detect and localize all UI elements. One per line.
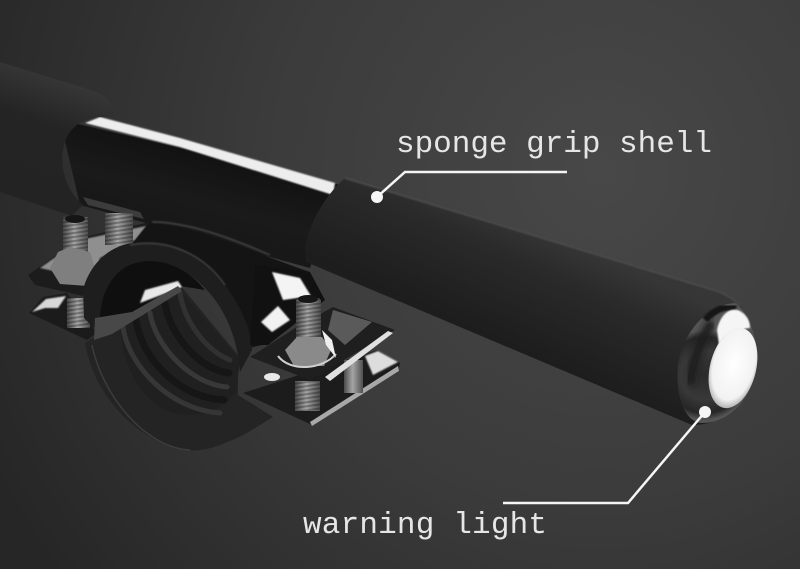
label: sponge grip shell: sponge grip shell [396, 127, 712, 162]
left grip [0, 62, 115, 216]
label: warning light: warning light [303, 508, 547, 543]
tube highlight [85, 117, 335, 195]
band rear [133, 222, 310, 350]
warning light end cap [677, 303, 765, 423]
bolt: front right [296, 295, 321, 342]
bolt: rear left [63, 215, 88, 261]
bolt: rear centre [105, 213, 133, 245]
handlebar tube [60, 117, 340, 268]
clamp band [83, 222, 310, 450]
lens [701, 323, 765, 413]
lower shell [85, 285, 273, 450]
right clamp plates and bolts [243, 265, 400, 426]
nut: rear left [50, 247, 95, 286]
lower left plate [29, 293, 97, 340]
clamp upper ring [83, 242, 252, 372]
lower bolts [295, 381, 320, 411]
rear clamp plates and bolts [28, 197, 150, 340]
lower plate [243, 350, 400, 425]
callout: sponge grip shell [371, 127, 712, 203]
sponge grip shell [305, 178, 757, 425]
upper plate [250, 307, 395, 380]
clamp opening highlight [140, 281, 182, 303]
callout: warning light [303, 406, 711, 543]
nut: front right [285, 337, 331, 366]
clamp ribs [123, 293, 230, 413]
